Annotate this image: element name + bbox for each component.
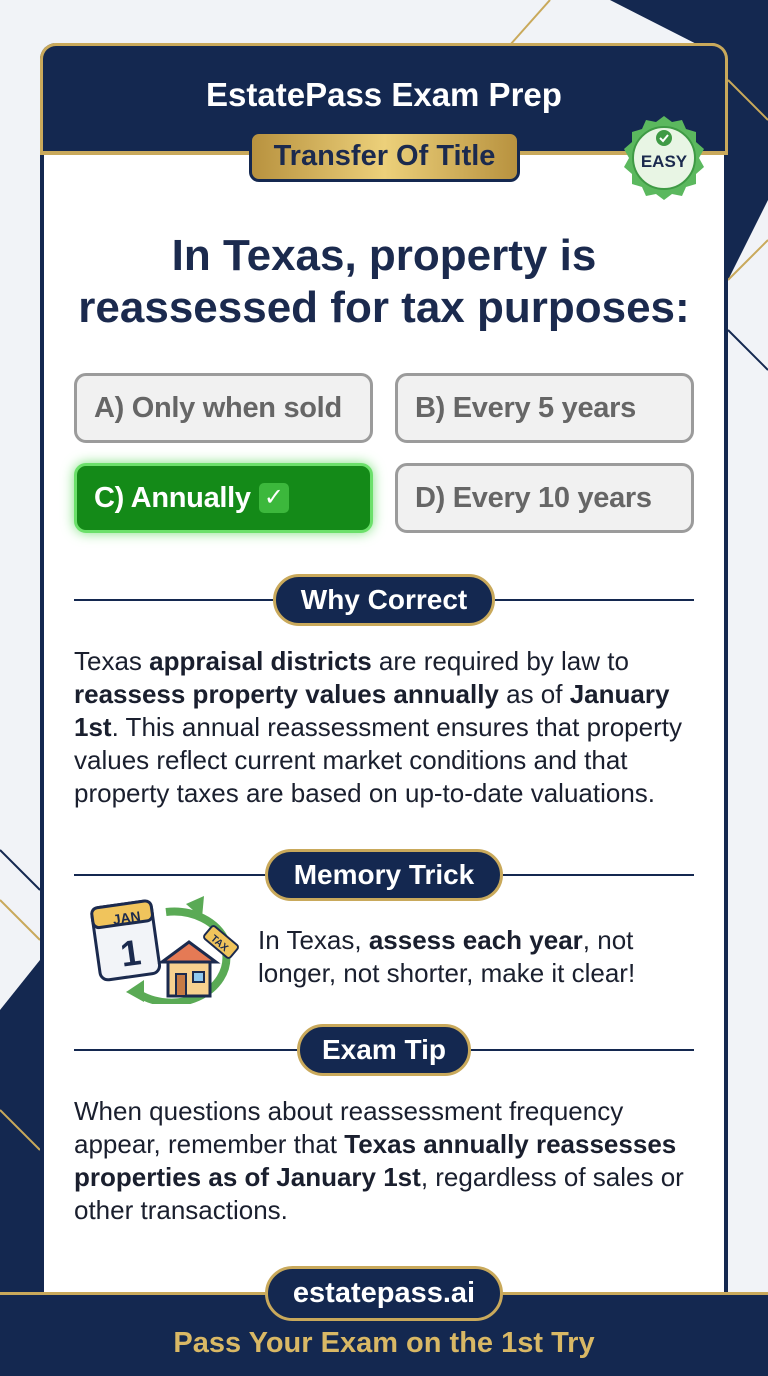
- badge: easy: [624, 116, 704, 200]
- why correct text: [74, 646, 682, 808]
- icon: calendar house cycle: 1: [118, 931, 143, 975]
- option D: D) Every 10 years: [415, 482, 652, 514]
- question title: [78, 231, 690, 332]
- heading: why correct: [273, 574, 495, 626]
- footer band: [0, 1292, 768, 1376]
- header band: [40, 43, 728, 155]
- memory trick text: [258, 925, 635, 988]
- option C correct: ✓: [264, 484, 284, 511]
- question title: reassessed for tax purposes:: [78, 283, 690, 332]
- badge: easy: EASY: [641, 152, 688, 171]
- why correct text: property taxes are based on up-to-date valuations.: [74, 778, 655, 808]
- icon: calendar house cycle: TAX: [208, 933, 230, 954]
- exam tip text: [74, 1096, 684, 1225]
- heading: why correct: Why Correct: [301, 584, 467, 615]
- exam tip text: When questions about reassessment frequency: [74, 1096, 623, 1126]
- exam tip text: properties as of January 1st, regardless of sales or: [74, 1162, 684, 1192]
- heading: memory trick: Memory Trick: [294, 859, 474, 890]
- exam tip text: appear, remember that Texas annually reassesses: [74, 1129, 676, 1159]
- option D: [395, 463, 694, 533]
- footer url pill: [265, 1266, 503, 1321]
- heading: exam tip: Exam Tip: [322, 1034, 446, 1065]
- memory trick text: longer, not shorter, make it clear!: [258, 958, 635, 988]
- option C correct: C) Annually: [94, 482, 251, 514]
- option A: [74, 373, 373, 443]
- option B: [395, 373, 694, 443]
- icon: calendar house cycle: JAN: [112, 908, 142, 928]
- heading: exam tip: [297, 1024, 471, 1076]
- option C correct: [74, 463, 373, 533]
- icon: calendar house cycle: [90, 896, 239, 1004]
- why correct text: 1st. This annual reassessment ensures that property: [74, 712, 682, 742]
- question title: In Texas, property is: [172, 231, 596, 280]
- header title: EstatePass Exam Prep: [206, 76, 562, 113]
- why correct text: Texas appraisal districts are required by law to: [74, 646, 629, 676]
- why correct text: reassess property values annually as of January: [74, 679, 669, 709]
- footer tagline: Pass Your Exam on the 1st Try: [173, 1327, 595, 1359]
- category pill: [249, 131, 520, 182]
- heading: memory trick: [265, 849, 503, 901]
- exam tip text: other transactions.: [74, 1195, 288, 1225]
- option B: B) Every 5 years: [415, 392, 636, 424]
- memory trick text: In Texas, assess each year, not: [258, 925, 633, 955]
- category pill: Transfer Of Title: [274, 140, 495, 172]
- why correct text: values reflect current market conditions and that: [74, 745, 628, 775]
- footer url pill: estatepass.ai: [293, 1277, 475, 1309]
- option A: A) Only when sold: [94, 392, 342, 424]
